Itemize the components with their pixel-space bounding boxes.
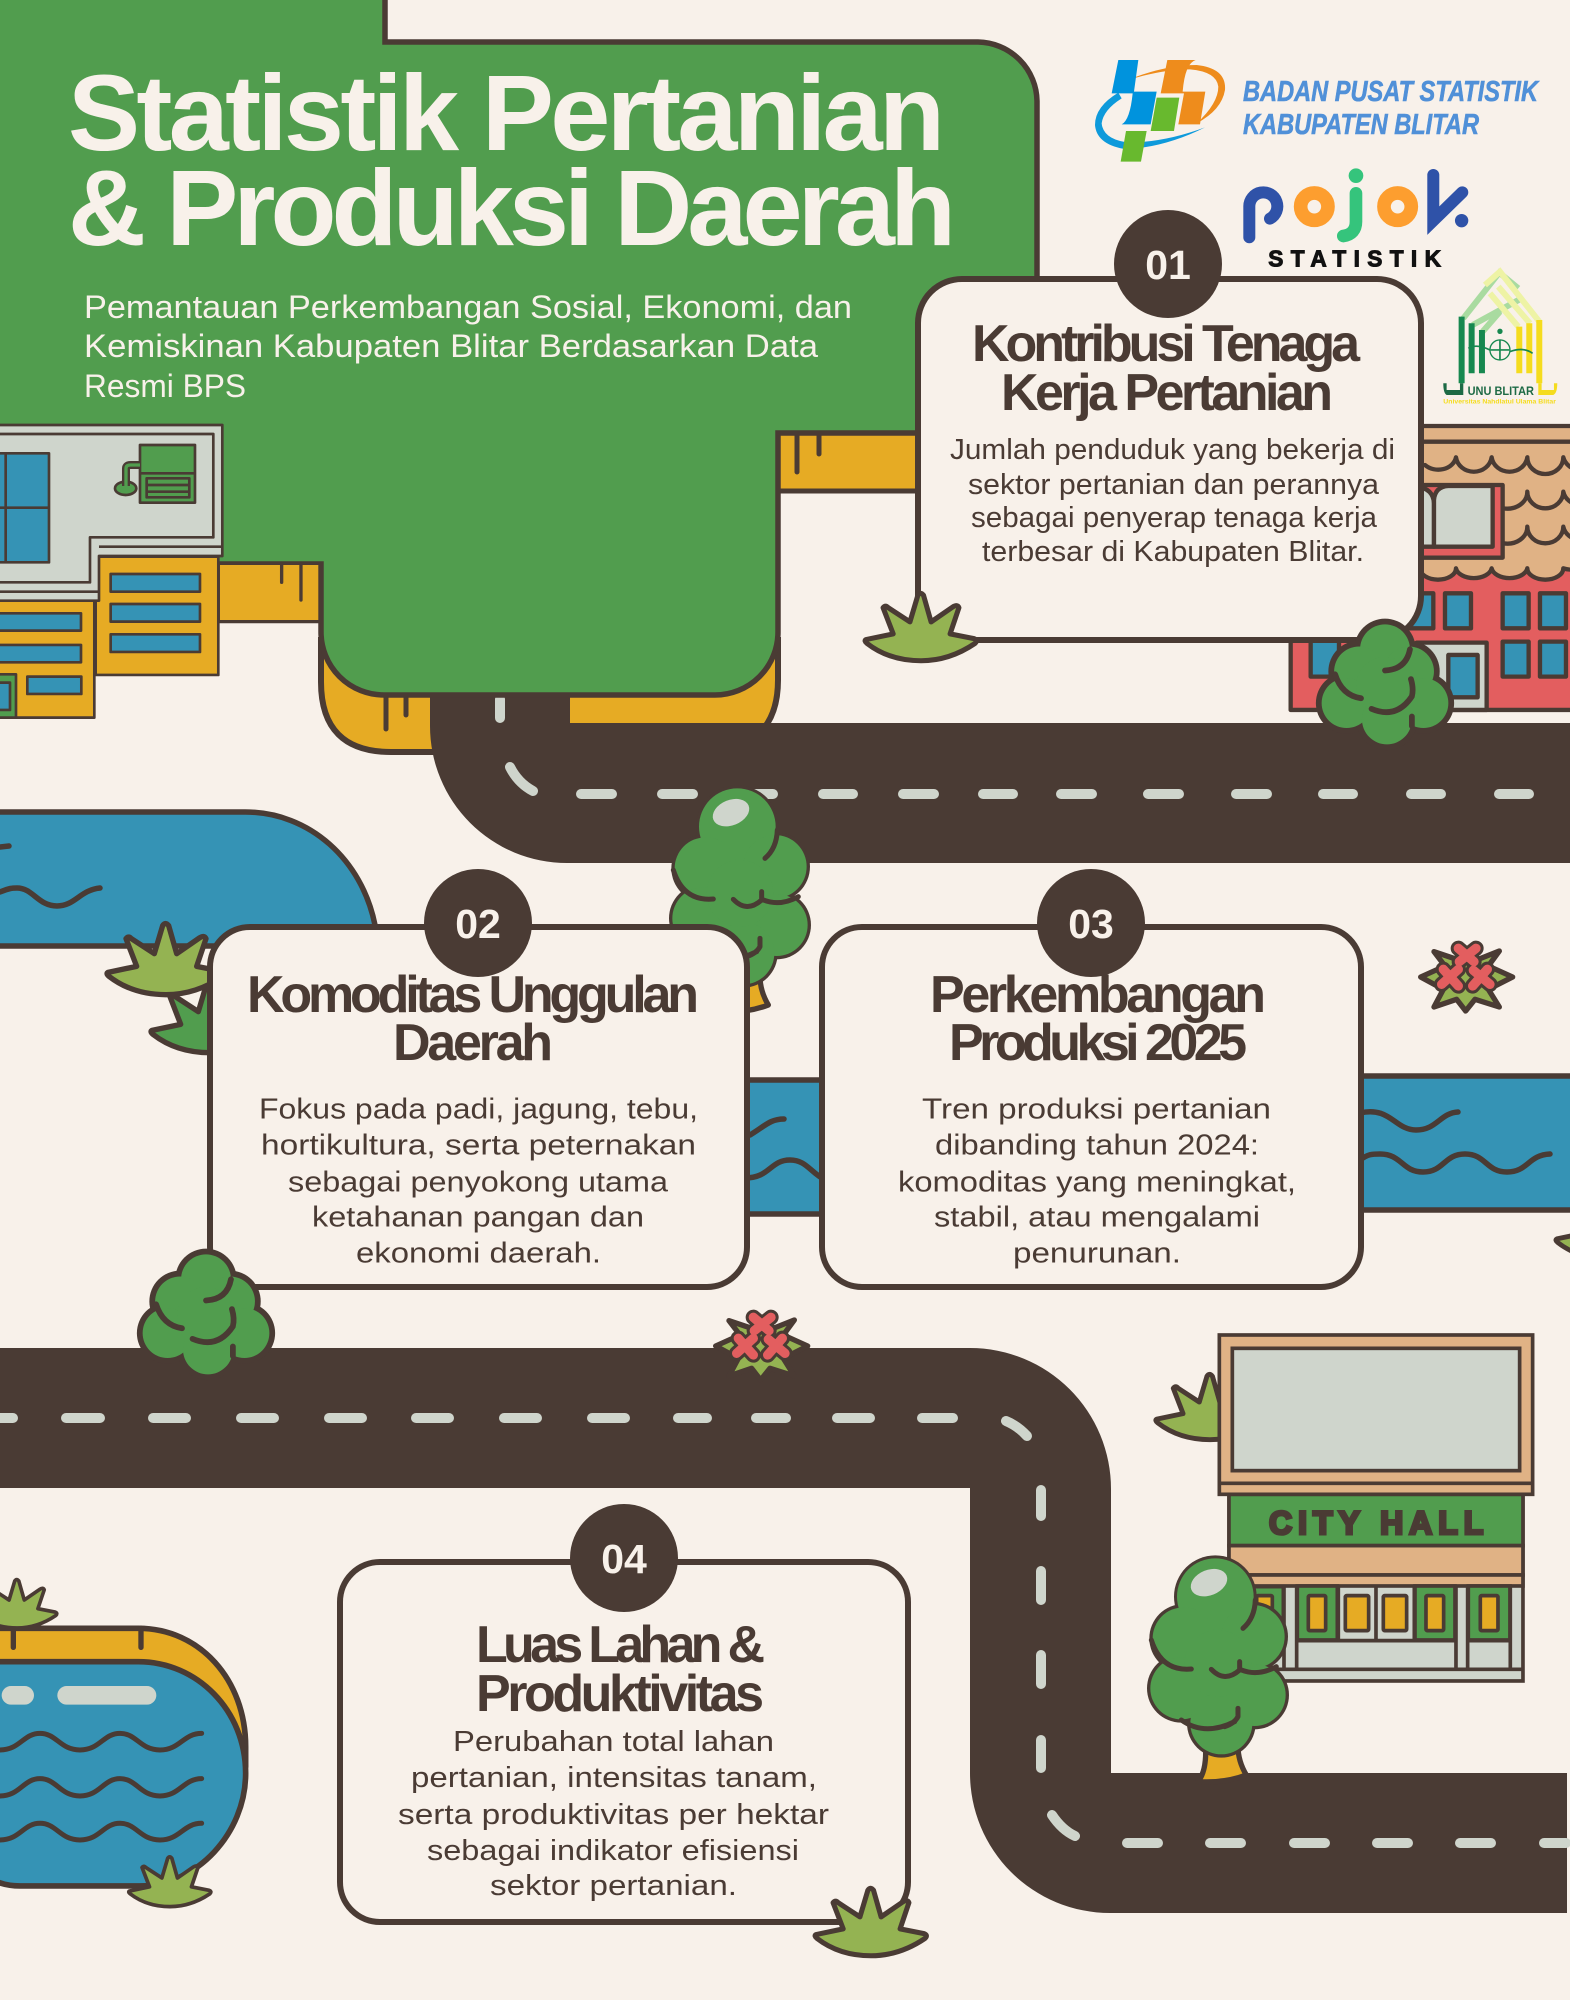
heading 03: [930, 966, 1266, 1072]
illustration: left building: [0, 425, 320, 718]
badge 03: 03: [1068, 901, 1114, 947]
panel: card 03: [822, 869, 1361, 1287]
illustration: city hall: [1219, 1335, 1533, 1681]
icon: grass on card 04: [815, 1888, 926, 1956]
badge 01: 01: [1145, 242, 1191, 288]
text 03: dibanding tahun 2024:: [935, 1130, 1259, 1162]
text 03: Tren produksi pertanian: [922, 1094, 1271, 1126]
text 01: sektor pertanian dan perannya: [968, 469, 1380, 501]
illustration: tree in front of city hall: [1147, 1555, 1289, 1782]
illustration: middle river: [730, 1080, 840, 1214]
logo: BPS: [1095, 60, 1225, 162]
heading 02: [247, 966, 699, 1072]
logo: Pojok Statistik: [1249, 168, 1468, 272]
icon: bush on card 02: [137, 1249, 275, 1380]
title: Statistik Pertanian: [68, 52, 945, 173]
text 01: sebagai penyerap tenaga kerja: [971, 502, 1378, 534]
text 02: hortikultura, serta peternakan: [261, 1130, 696, 1162]
heading 02: Daerah: [393, 1014, 553, 1072]
text 04: serta produktivitas per hektar: [398, 1799, 829, 1831]
logo: UNU Blitar: [1443, 272, 1557, 405]
text 03: stabil, atau mengalami: [934, 1202, 1260, 1234]
heading 03: Perkembangan: [930, 966, 1266, 1024]
subtitle: Kemiskinan Kabupaten Blitar Berdasarkan Data: [84, 328, 818, 364]
illustration: lake bottom left: [0, 1628, 246, 1886]
icon: grass top of lake: [0, 1580, 57, 1628]
heading 04: [476, 1616, 765, 1723]
subtitle: Pemantauan Perkembangan Sosial, Ekonomi, dan: [84, 289, 852, 325]
heading 01: Kontribusi Tenaga: [972, 315, 1361, 373]
text 04: [398, 1726, 829, 1902]
text 02: Fokus pada padi, jagung, tebu,: [259, 1094, 698, 1126]
road: lower: [0, 1348, 1567, 1913]
text 04: Perubahan total lahan: [453, 1726, 774, 1758]
subtitle: Resmi BPS: [84, 368, 246, 404]
panel: card 01: [918, 210, 1421, 640]
text 03: komoditas yang meningkat,: [898, 1166, 1296, 1198]
title: [68, 52, 956, 268]
illustration: right-edge grass: [1556, 1195, 1570, 1259]
logo: Pojok Statistik: STATISTIK: [1268, 246, 1442, 272]
subtitle: [84, 289, 852, 404]
illustration: city hall: CITY HALL: [1269, 1505, 1483, 1541]
text 03: penurunan.: [1013, 1238, 1181, 1270]
text 04: pertanian, intensitas tanam,: [411, 1762, 817, 1794]
panel: card 04: [340, 1504, 908, 1922]
panel: card 02: [210, 869, 747, 1287]
badge 03: [1037, 869, 1145, 977]
logo text: Badan Pusat Statistik: [1243, 76, 1540, 141]
heading 01: [972, 315, 1361, 422]
text 01: terbesar di Kabupaten Blitar.: [982, 536, 1364, 568]
heading 04: Produktivitas: [476, 1665, 764, 1723]
text 04: sektor pertanian.: [490, 1870, 737, 1902]
text 03: [898, 1094, 1296, 1270]
logo: UNU Blitar: UNU BLITAR: [1468, 384, 1534, 398]
panel: green title block: [0, 0, 1037, 695]
icon: flower on road: [716, 1317, 808, 1380]
illustration: dark grass beside card 02: [151, 982, 268, 1053]
title: & Produksi Daerah: [68, 147, 956, 268]
road: upper: [430, 660, 1570, 863]
heading 03: Produksi 2025: [949, 1014, 1247, 1072]
illustration: light grass beside card 02: [107, 924, 224, 995]
text 02: ekonomi daerah.: [356, 1238, 601, 1270]
icon: flower right: [1421, 948, 1513, 1011]
text 04: sebagai indikator efisiensi: [427, 1835, 799, 1867]
badge 02: [424, 869, 532, 977]
heading 01: Kerja Pertanian: [1001, 364, 1333, 422]
heading 02: Komoditas Unggulan: [247, 966, 699, 1024]
icon: bush on card 01: [1316, 619, 1454, 750]
icon: grass bottom of lake: [129, 1857, 211, 1907]
text 02: sebagai penyokong utama: [288, 1166, 669, 1198]
text 01: Jumlah penduduk yang bekerja di: [950, 434, 1395, 466]
logo: UNU Blitar: Universitas Nahdlatul Ulama Blitar: [1443, 399, 1557, 405]
illustration: right building: [1291, 426, 1570, 710]
badge 04: 04: [601, 1536, 647, 1582]
illustration: right river: [1350, 1076, 1570, 1210]
yellow ground under green panel: [321, 640, 778, 752]
icon: grass on card 01: [865, 593, 976, 661]
badge 04: [570, 1504, 678, 1612]
text 02: ketahanan pangan dan: [312, 1202, 644, 1234]
text 01: [950, 434, 1395, 568]
yellow bar behind green panel right: [770, 433, 930, 491]
badge 02: 02: [455, 901, 501, 947]
logo text: Badan Pusat Statistik: KABUPATEN BLITAR: [1243, 109, 1479, 141]
illustration: tree behind card 02: [669, 785, 811, 1012]
illustration: lake top left: [0, 812, 380, 946]
heading 04: Luas Lahan &: [476, 1616, 765, 1674]
icon: grass by city hall: [1156, 1374, 1264, 1440]
badge 01: [1114, 210, 1222, 318]
text 02: [259, 1094, 698, 1270]
